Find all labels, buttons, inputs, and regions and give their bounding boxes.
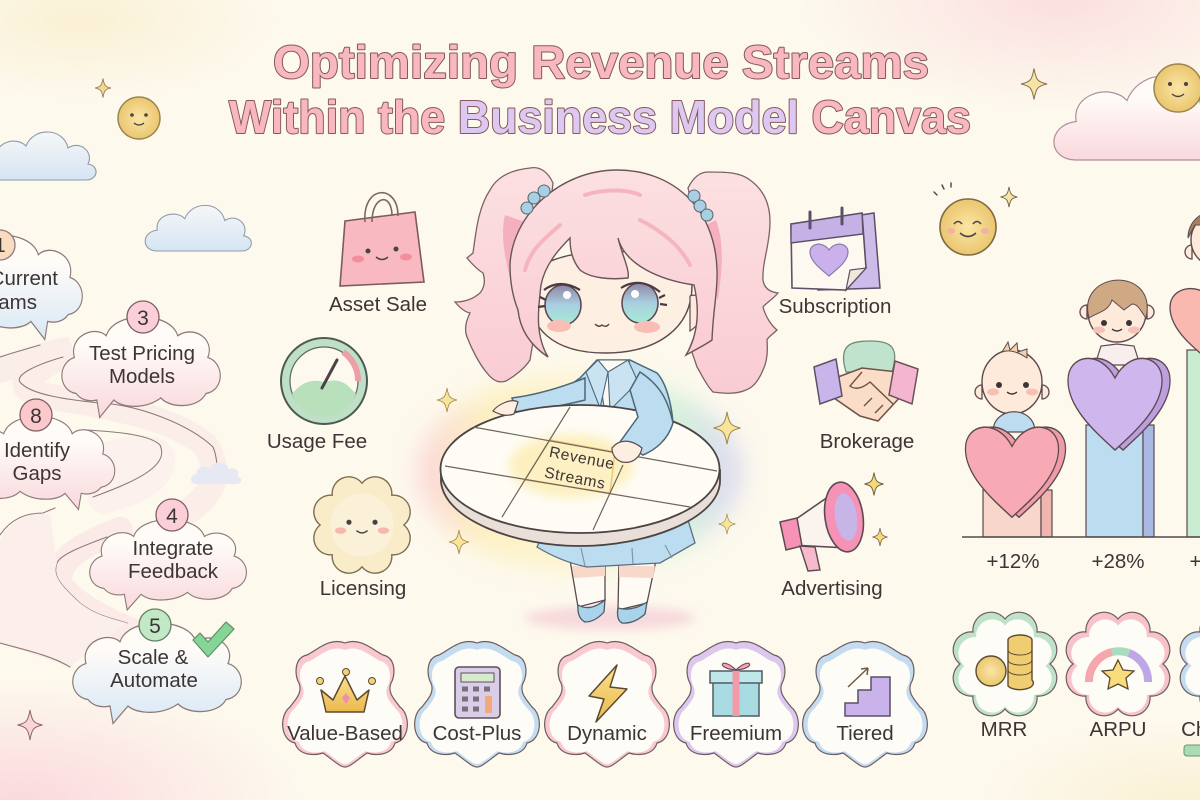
step 5: scale and automate: Automate [110, 669, 198, 692]
badge: MRR: MRR [981, 718, 1027, 741]
winding road [0, 345, 241, 667]
icon: megaphone [780, 473, 888, 571]
hair highlights [525, 190, 690, 270]
step 5: scale and automate: Scale & [118, 646, 189, 669]
label: licensing: Licensing [320, 577, 406, 600]
pigtail left [455, 168, 553, 382]
step 5: scale and automate: 5 [149, 615, 161, 638]
badge: value-based: Value-Based [287, 722, 403, 745]
label: subscription: Subscription [779, 295, 891, 318]
badge: freemium: Freemium [690, 722, 782, 745]
jacket [530, 360, 673, 520]
icon: coin stack [976, 635, 1033, 690]
title: Optimizing Revenue Streams [273, 36, 929, 88]
badge: dynamic [545, 641, 669, 767]
legs [570, 560, 656, 610]
step 4: integrate feedback: 4 [166, 505, 178, 528]
badge: MRR [953, 612, 1057, 741]
rainbow halo [418, 374, 742, 570]
icon: calculator [455, 667, 500, 718]
step 4: integrate feedback [90, 499, 246, 610]
shirt and collar [597, 360, 630, 420]
hands [493, 401, 518, 415]
label: brokerage: Brokerage [820, 430, 914, 453]
badge: dynamic: Dynamic [567, 722, 647, 745]
skirt [537, 520, 695, 567]
icon: coin top left [118, 97, 160, 139]
step 3: test pricing models: 3 [137, 307, 149, 330]
badge: tiered [803, 641, 927, 767]
step 2: identify gaps: 8 [30, 405, 42, 428]
bar +12% [965, 342, 1066, 537]
icon: handshake [814, 341, 918, 421]
icon: shopping bag [340, 193, 424, 286]
icon: stairs [845, 668, 890, 716]
icon: licensing badge [314, 477, 410, 573]
step 2: identify gaps: Identify [4, 439, 71, 462]
label: advertising: Advertising [781, 577, 883, 600]
icon: gauge star [1089, 651, 1148, 689]
bar chart: growth: +28% [1091, 550, 1145, 573]
title [229, 36, 971, 143]
icon: check mark [193, 622, 234, 657]
step 3: test pricing models: Models [109, 365, 175, 388]
grid and revenue streams cell: Streams [543, 464, 607, 493]
badge: ARPU [1066, 612, 1170, 741]
badge: churn [1180, 612, 1200, 756]
badge: cost-plus [415, 641, 539, 767]
label: asset sale: Asset Sale [329, 293, 427, 316]
icon: lightning [589, 665, 627, 722]
bar chart: growth: +12% [986, 550, 1040, 573]
label: usage fee: Usage Fee [267, 430, 367, 453]
icon: coin top right [1154, 64, 1200, 112]
bar chart: growth [962, 209, 1200, 573]
icon: calendar [791, 208, 880, 290]
left arm [512, 378, 585, 412]
badge: cost-plus: Cost-Plus [433, 722, 521, 745]
pigtail right [688, 172, 778, 393]
icon: usage gauge [281, 338, 367, 424]
badge: ARPU: ARPU [1090, 718, 1146, 741]
bar third [1170, 209, 1200, 537]
icon: coin mid right [940, 199, 996, 255]
face [528, 251, 692, 353]
right arm [620, 372, 673, 455]
icon: crown [316, 668, 376, 712]
hair ties [521, 185, 713, 221]
character: chibi girl with canvas table [418, 168, 778, 630]
step 4: integrate feedback: Feedback [128, 560, 219, 583]
step 4: integrate feedback: Integrate [133, 537, 213, 560]
step 3: test pricing models [62, 301, 220, 418]
grid and revenue streams cell: Revenue [548, 444, 616, 473]
sparkles [437, 388, 457, 412]
icon: gift [710, 663, 762, 716]
badge: value-based [283, 641, 407, 767]
inner hair shade [503, 215, 722, 300]
shoes [578, 600, 647, 623]
step 2: identify gaps [0, 399, 115, 510]
step 5: scale and automate [73, 609, 241, 724]
step 1: current streams [0, 230, 82, 340]
badge: tiered: Tiered [836, 722, 894, 745]
grid and revenue streams cell [445, 407, 717, 530]
blush and mouth [547, 320, 571, 332]
badge: freemium [674, 641, 798, 767]
step 3: test pricing models: Test Pricing [89, 342, 195, 365]
step 2: identify gaps: Gaps [12, 462, 62, 485]
title: Within the Business Model Canvas [229, 91, 971, 143]
ears [521, 295, 703, 331]
floor shadow [525, 606, 695, 630]
eyes [538, 283, 667, 325]
bar +28% [1068, 280, 1170, 537]
front hair [510, 170, 717, 357]
canvas table [441, 470, 720, 546]
